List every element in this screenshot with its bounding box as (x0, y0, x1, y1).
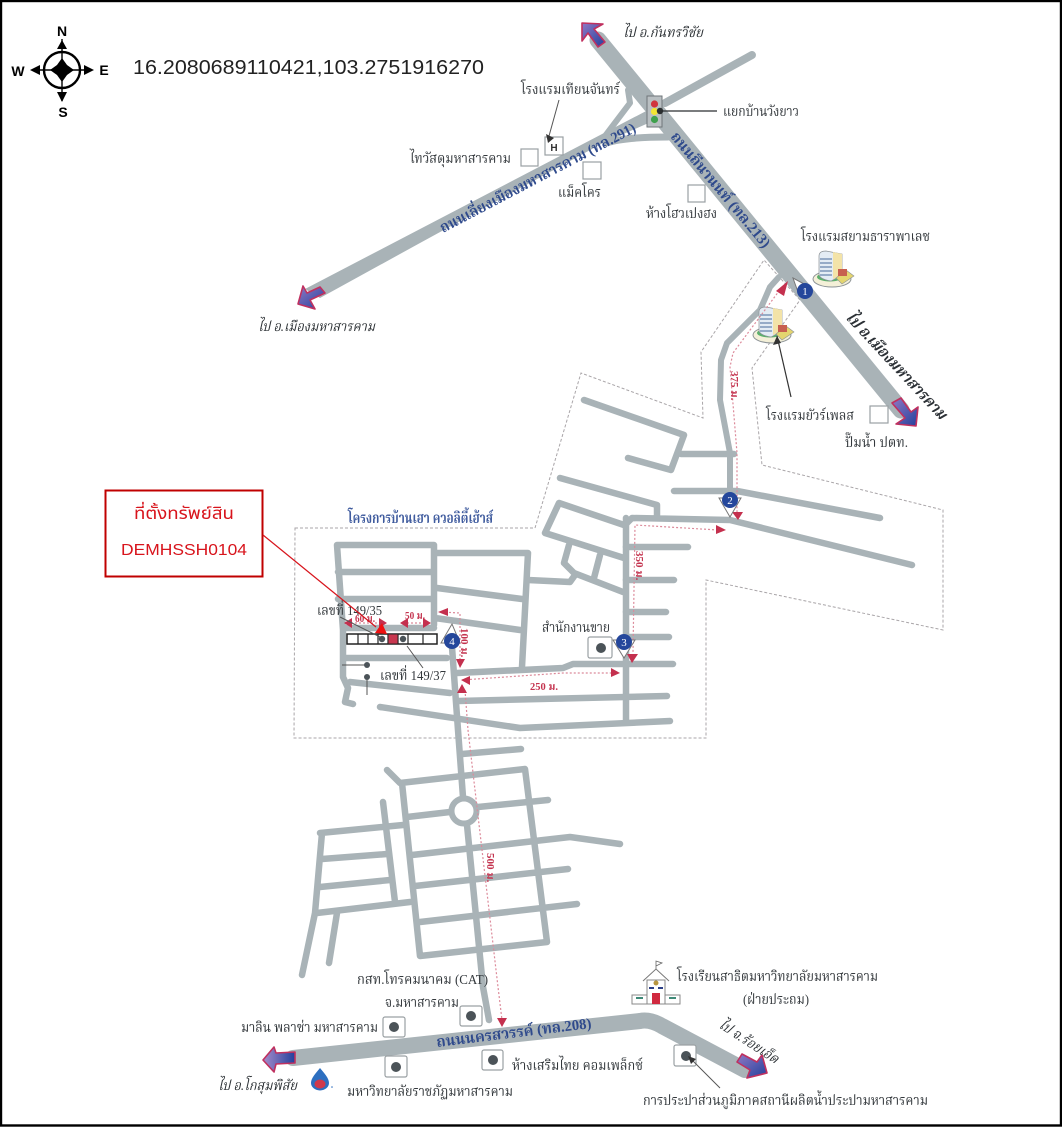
road network: highways (293, 40, 901, 1070)
numbered waypoints: 1 (802, 286, 808, 298)
bottom landmarks: จ.มหาสารคาม (385, 996, 459, 1011)
PTT petrol pump (845, 406, 908, 451)
direction labels (218, 22, 954, 1095)
bottom landmarks (241, 969, 643, 1100)
distance labels: 350 ม. (633, 551, 645, 581)
landmarks: top junction: ห้างโฮวเปงฮง (646, 203, 717, 222)
numbered waypoints: 3 (621, 637, 627, 649)
road labels: ถนนถีนานนท์ (ทล.213) (667, 127, 775, 251)
PTT petrol pump: ปั๊มน้ำ ปตท. (845, 432, 908, 451)
icon: Siam Thara Palace hotel (800, 226, 930, 287)
callout: property location (106, 490, 262, 576)
landmarks: top junction (409, 79, 799, 222)
school label: (ฝ่ายประถม) (743, 992, 809, 1008)
numbered waypoints: 4 (449, 636, 455, 648)
distance labels: 250 ม. (530, 681, 558, 693)
callout pointer arrow (263, 535, 387, 634)
bottom landmarks: มาลิน พลาซ่า มหาสารคาม (241, 1019, 378, 1036)
distance labels: 375 ม. (728, 371, 740, 401)
compass rose: E (99, 62, 109, 78)
bottom landmarks: มหาวิทยาลัยราชภัฏมหาสารคาม (347, 1084, 513, 1100)
numbered waypoints: 2 (727, 495, 733, 507)
compass rose: N (57, 23, 67, 39)
numbered waypoints (441, 278, 813, 658)
property row: เลขที่ 149/35 (317, 600, 382, 619)
project name: โครงการบ้านเฮา ควอลิตี้เฮ้าส์ (347, 507, 494, 527)
property row: เลขที่ 149/37 (380, 665, 446, 684)
road labels (435, 117, 775, 1051)
landmarks: top junction: แม็คโคร (558, 182, 601, 201)
landmarks: top junction: H (550, 143, 558, 154)
callout: property location: DEMHSSH0104 (121, 542, 247, 559)
road labels: ถนนเลี่ยงเมืองมหาสารคาม (ทล.291) (436, 117, 639, 237)
icon: Your Place hotel (753, 307, 794, 343)
coordinates: 16.2080689110421,103.2751916270 (133, 57, 484, 79)
bottom landmarks: ห้างเสริมไทย คอมเพล็กซ์ (512, 1055, 643, 1074)
road labels: ถนนนครสวรรค์ (ทล.208) (435, 1013, 592, 1051)
sales office (542, 620, 612, 658)
distance labels: 60 ม. (355, 613, 375, 625)
route dashes and arrows (344, 281, 788, 1027)
compass rose: W (11, 63, 25, 79)
direction labels: ไป อ.เมืองมหาสารคาม (842, 306, 954, 424)
school label: โรงเรียนสาธิตมหาวิทยาลัยมหาสารคาม (676, 966, 878, 985)
compass rose: S (58, 104, 68, 120)
icon: Siam Thara Palace hotel: โรงแรมสยามธาราพาเลซ (800, 226, 930, 245)
icon: school (632, 961, 680, 1004)
traffic light (647, 96, 717, 127)
distance labels: 500 ม. (484, 853, 496, 883)
distance labels: 50 ม. (405, 610, 425, 622)
landmarks: top junction: โรงแรมเทียนจันทร์ (520, 79, 621, 98)
bottom landmarks: กสท.โทรคมนาคม (CAT) (357, 969, 488, 988)
icon: PTT flame (311, 1068, 333, 1091)
water works (643, 1045, 928, 1109)
distance labels: 100 ม. (458, 628, 470, 658)
direction labels: ไป อ.โกสุมพิสัย (218, 1075, 298, 1095)
sales office: สำนักงานขาย (542, 620, 610, 636)
water works: การประปาส่วนภูมิภาคสถานีผลิตน้ำประปามหาสารคาม (643, 1090, 928, 1109)
label: Your Place hotel: โรงแรมยัวร์เพลส (765, 405, 854, 424)
direction labels: ไป จ.ร้อยเอ็ด (716, 1014, 784, 1068)
road network: local streets (302, 277, 912, 1020)
distance labels (355, 371, 740, 883)
label: Your Place hotel (765, 336, 854, 424)
boundary of neighbourhood (dashed) (294, 260, 943, 738)
direction labels: ไป อ.กันทรวิชัย (623, 22, 705, 41)
callout: property location: ที่ตั้งทรัพย์สิน (134, 501, 234, 523)
landmarks: top junction: ไทวัสดุมหาสารคาม (409, 148, 511, 167)
compass rose (11, 23, 109, 120)
property row (317, 600, 446, 695)
direction labels: ไป อ.เมืองมหาสารคาม (258, 316, 376, 335)
landmarks: top junction: แยกบ้านวังยาว (723, 103, 799, 120)
direction arrows (263, 23, 918, 1078)
school label (676, 966, 878, 1008)
